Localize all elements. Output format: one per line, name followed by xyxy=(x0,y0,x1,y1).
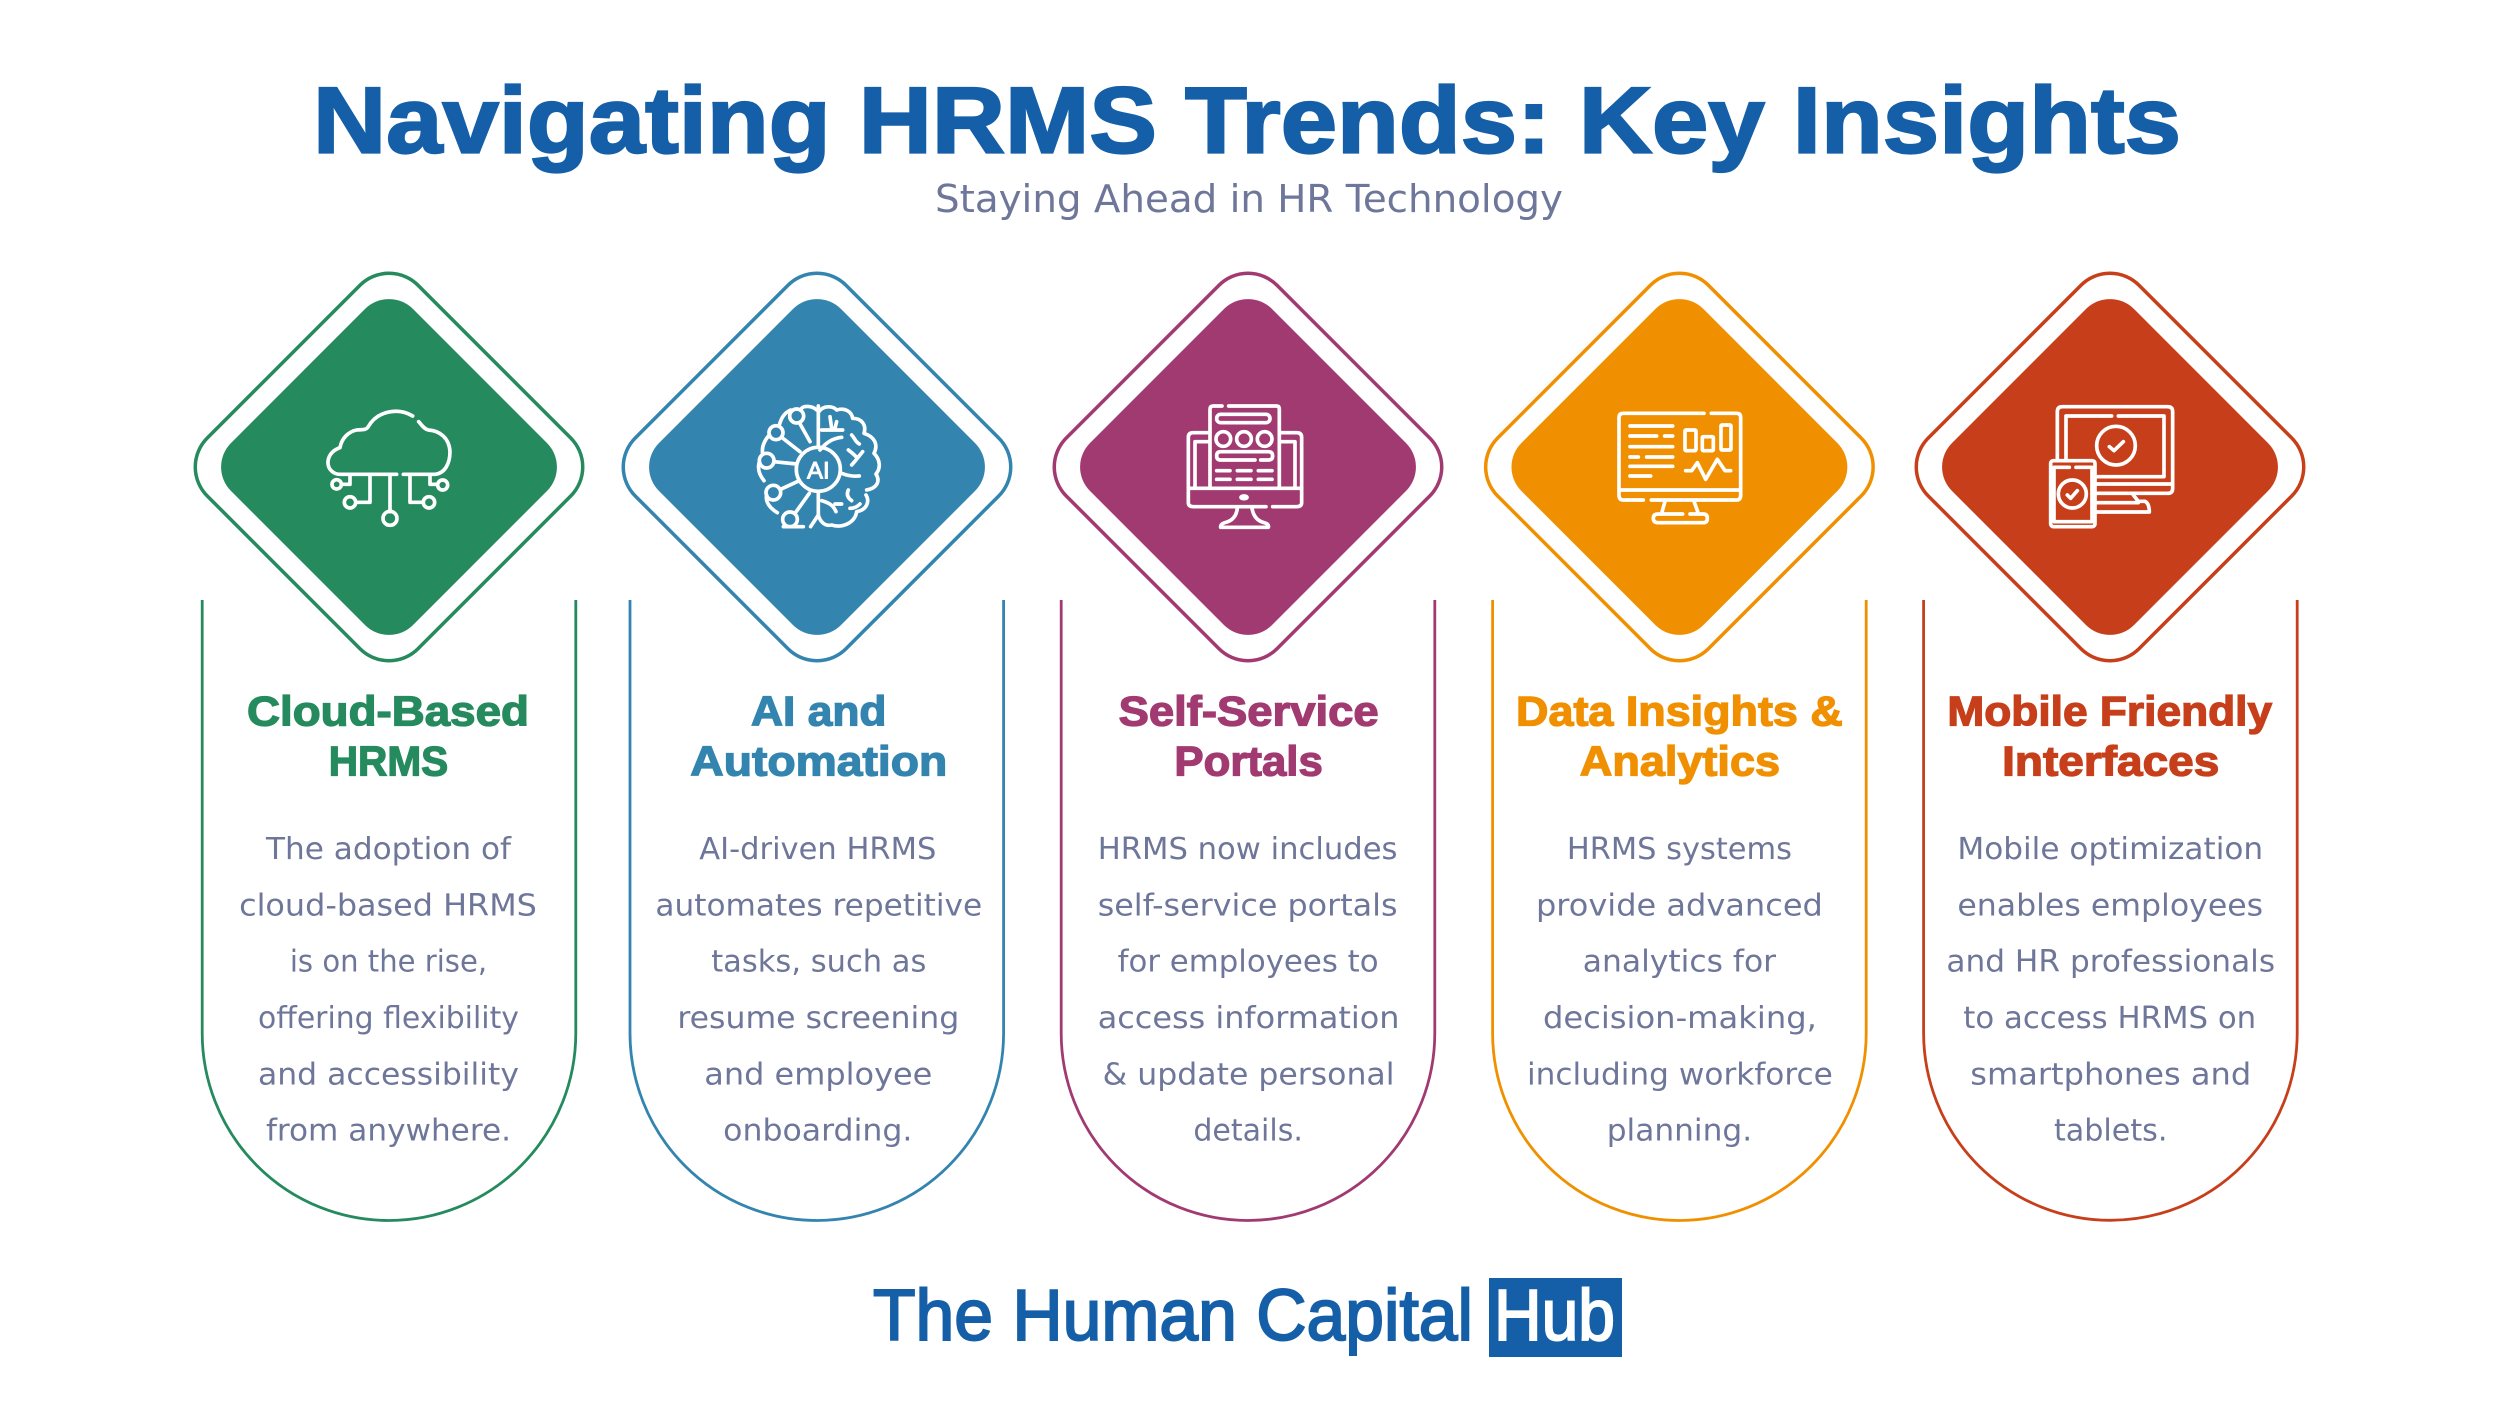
diamond frame xyxy=(606,256,1028,678)
heading: Automation xyxy=(690,737,947,785)
heading xyxy=(1947,687,2273,785)
description: analytics for xyxy=(1583,945,1777,980)
heading xyxy=(1516,687,1843,785)
description: resume screening xyxy=(677,1001,959,1036)
description: is on the rise, xyxy=(290,945,487,980)
heading: Interfaces xyxy=(2002,737,2219,785)
description: offering flexibility xyxy=(258,1001,519,1036)
heading xyxy=(1119,687,1379,785)
panel: Cloud-Based HRMS xyxy=(178,256,600,1220)
diamond fill xyxy=(1066,285,1430,649)
description: tablets. xyxy=(2054,1114,2168,1149)
description: and employee xyxy=(704,1057,932,1092)
description: automates repetitive xyxy=(655,888,982,923)
diamond fill xyxy=(635,285,999,649)
diamond fill xyxy=(207,285,571,649)
description: onboarding. xyxy=(723,1114,912,1149)
icon: analytics monitor xyxy=(1619,413,1741,523)
description: planning. xyxy=(1607,1114,1752,1149)
diamond fill xyxy=(1497,285,1861,649)
heading: AI and xyxy=(751,687,887,735)
description: decision-making, xyxy=(1543,1001,1817,1036)
diamond frame xyxy=(1469,256,1890,678)
description: details. xyxy=(1193,1114,1303,1149)
icon: desktop and phone xyxy=(2051,407,2173,527)
description: smartphones and xyxy=(1970,1057,2251,1092)
heading: Data Insights & xyxy=(1516,687,1843,735)
heading xyxy=(247,687,529,785)
description: cloud-based HRMS xyxy=(239,888,537,923)
subtitle: Staying Ahead in HR Technology xyxy=(935,177,1563,221)
diamond fill xyxy=(1928,285,2292,649)
description: self-service portals xyxy=(1098,888,1398,923)
heading xyxy=(690,687,947,785)
capsule outline xyxy=(1493,600,1866,1220)
panel: Mobile Friendly Interfaces xyxy=(1899,256,2321,1220)
description: HRMS systems xyxy=(1567,832,1792,867)
heading: Self-Service xyxy=(1119,687,1379,735)
diamond frame xyxy=(1037,256,1459,678)
description: for employees to xyxy=(1118,945,1379,980)
title: Navigating HRMS Trends: Key Insights xyxy=(313,68,2181,172)
description: access information xyxy=(1098,1001,1400,1036)
icon: AI brain: AI xyxy=(807,457,830,484)
description xyxy=(655,832,982,1149)
heading: Portals xyxy=(1174,737,1323,785)
capsule outline xyxy=(1924,600,2297,1220)
heading: Mobile Friendly xyxy=(1947,687,2273,735)
logo box xyxy=(1489,1278,1622,1357)
description: and accessibility xyxy=(258,1057,519,1092)
description: The adoption of xyxy=(265,832,513,867)
capsule outline xyxy=(1061,600,1435,1220)
description: tasks, such as xyxy=(711,945,926,980)
heading: HRMS xyxy=(329,737,448,785)
logo box text: Hub xyxy=(1494,1276,1615,1356)
logo: The Human Capital Hub xyxy=(873,1276,1622,1357)
description xyxy=(239,832,537,1149)
logo text: The Human Capital xyxy=(873,1276,1473,1356)
description: from anywhere. xyxy=(266,1114,511,1149)
heading: Analytics xyxy=(1580,737,1780,785)
description: AI-driven HRMS xyxy=(699,832,936,867)
description xyxy=(1527,832,1833,1149)
icon: portal on monitor xyxy=(1188,406,1302,527)
heading: Cloud-Based xyxy=(247,687,529,735)
description xyxy=(1946,832,2275,1149)
description: provide advanced xyxy=(1536,888,1823,923)
description: & update personal xyxy=(1103,1057,1395,1092)
icon: cloud network xyxy=(328,411,450,525)
description: enables employees xyxy=(1957,888,2263,923)
description: HRMS now includes xyxy=(1098,832,1398,867)
description: to access HRMS on xyxy=(1963,1001,2256,1036)
diamond frame xyxy=(178,256,600,678)
capsule outline xyxy=(630,600,1004,1220)
panel: Data Insights & Analytics xyxy=(1469,256,1890,1220)
panel: Self-Service Portals xyxy=(1037,256,1459,1220)
description: and HR professionals xyxy=(1946,945,2275,980)
capsule outline xyxy=(202,600,576,1220)
icon: AI brain xyxy=(759,406,879,527)
diamond frame xyxy=(1899,256,2321,678)
description: including workforce xyxy=(1527,1057,1833,1092)
panel: AI and Automation xyxy=(606,256,1028,1220)
description xyxy=(1098,832,1400,1149)
description: Mobile optimization xyxy=(1957,832,2263,867)
